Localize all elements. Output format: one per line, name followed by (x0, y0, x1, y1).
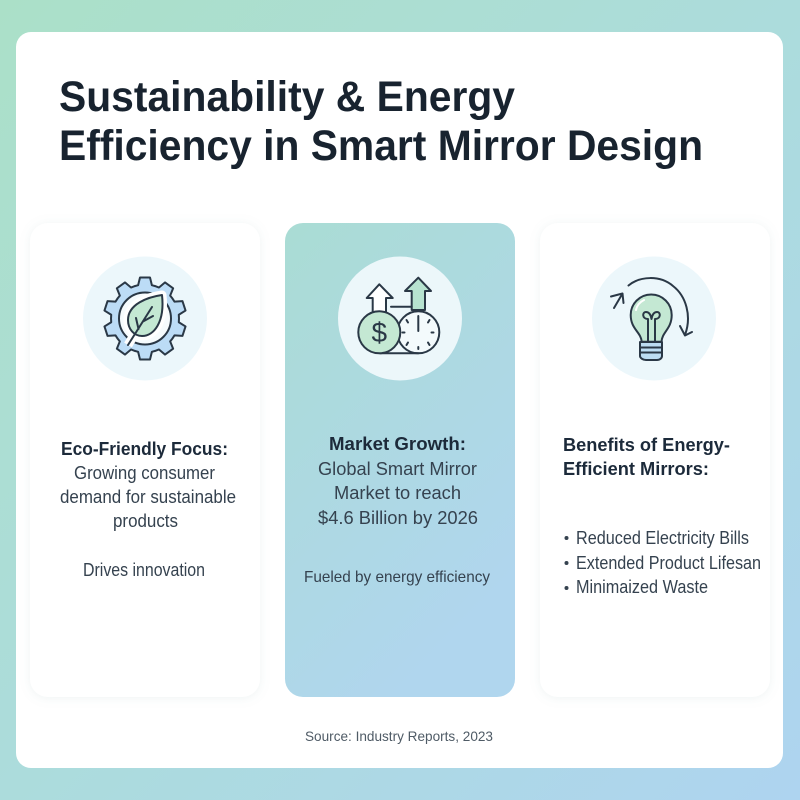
text: market growth: Global Smart Mirror (318, 459, 477, 479)
panel: market growth (285, 223, 515, 697)
text: eco-friendly focus: products (113, 511, 178, 531)
text: eco-friendly focus: Drives innovation (83, 560, 205, 580)
panel: benefits (540, 223, 770, 697)
icon: coin, clock and arrows (338, 256, 462, 380)
text: eco-friendly focus: Growing consumer (74, 463, 215, 483)
text: benefits heading (563, 435, 730, 479)
list: benefits: Extended Product Lifesan (576, 553, 761, 573)
text: benefits heading: Benefits of Energy- (563, 435, 730, 455)
title: Efficiency in Smart Mirror Design (59, 122, 703, 170)
text: benefits heading: Efficient Mirrors: (563, 459, 709, 479)
list: benefits: Reduced Electricity Bills (576, 528, 749, 548)
title (59, 73, 703, 170)
icon: coin, clock and arrows: $ (372, 317, 388, 348)
text: market growth: Market to reach (334, 483, 461, 503)
text: eco-friendly focus (60, 439, 236, 580)
text: eco-friendly focus: Eco-Friendly Focus: (61, 439, 228, 459)
text: market growth: Market Growth: (329, 434, 466, 454)
panel: eco-friendly focus (30, 223, 260, 697)
title: Sustainability & Energy (59, 73, 515, 121)
list: benefits (564, 528, 761, 597)
source note: Source: Industry Reports, 2023 (305, 728, 493, 744)
text: market growth: Fueled by energy efficiency (304, 569, 490, 586)
text: eco-friendly focus: demand for sustainable (60, 487, 236, 507)
icon: gear with leaf (83, 256, 207, 380)
text: market growth: $4.6 Billion by 2026 (318, 508, 478, 528)
list: benefits: Minimaized Waste (576, 577, 708, 597)
text: market growth (304, 434, 490, 586)
icon: light bulb with arrows (592, 256, 716, 380)
